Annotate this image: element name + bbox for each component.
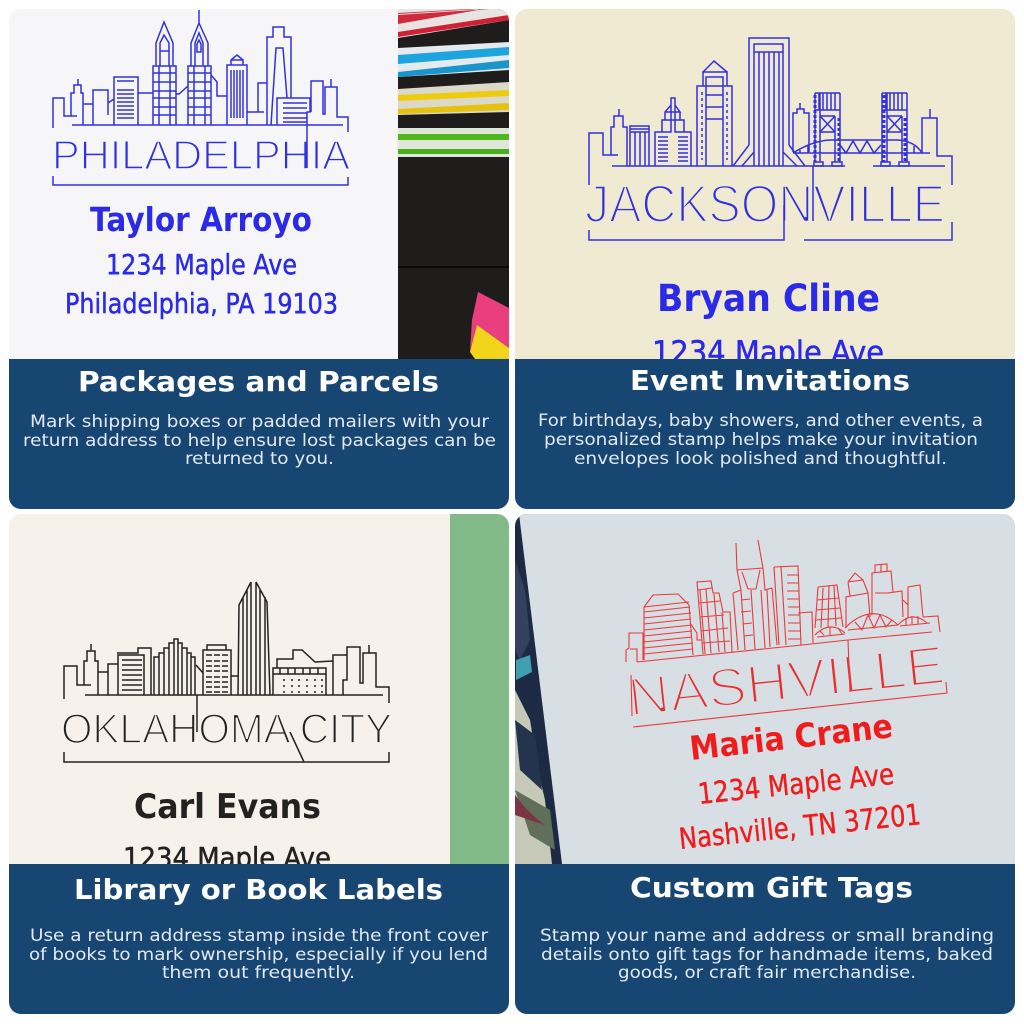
description: Mark shipping boxes or padded mailers with your — [30, 412, 489, 431]
description: personalized stamp helps make your invitation — [544, 430, 978, 449]
description: details onto gift tags for handmade items, baked — [541, 945, 993, 964]
panel: event invitations — [515, 9, 1015, 509]
skyline: Philadelphia — [53, 10, 348, 185]
description: Stamp your name and address or small branding — [540, 926, 994, 945]
description: them out frequently. — [162, 963, 355, 982]
description — [29, 926, 488, 982]
city name: JACKSONVILLE: JACKSONVILLE — [585, 175, 945, 234]
caption band — [9, 359, 509, 509]
stamp street: 1234 Maple Ave — [696, 757, 896, 811]
stamp name: Maria Crane — [687, 706, 895, 768]
description — [23, 412, 496, 468]
panel: custom gift tags — [515, 514, 1015, 1014]
heading: Packages and Parcels — [78, 365, 439, 398]
heading: Library or Book Labels — [74, 873, 443, 906]
city name: NASHVILLE: NASHVILLE — [625, 635, 948, 728]
skyline: Nashville — [626, 540, 947, 727]
description: goods, or craft fair merchandise. — [618, 963, 916, 982]
panel: packages and parcels — [9, 9, 509, 509]
description: return address to help ensure lost packages can be — [23, 431, 496, 450]
photo: Jacksonville stamp on cream paper — [515, 9, 1015, 371]
skyline: Oklahoma City — [64, 582, 389, 762]
stamp name: Carl Evans — [134, 787, 321, 827]
stamp city: Philadelphia, PA 19103 — [65, 287, 338, 320]
stamp street (cropped): 1234 Maple Ave — [123, 841, 331, 874]
caption band — [515, 864, 1015, 1014]
heading: Event Invitations — [630, 364, 910, 397]
panel: library or book labels — [9, 514, 509, 1014]
description: envelopes look polished and thoughtful. — [574, 449, 947, 468]
city name: PHILADELPHIA: PHILADELPHIA — [52, 132, 351, 178]
heading: Custom Gift Tags — [630, 871, 913, 904]
description: returned to you. — [185, 449, 334, 468]
photo: Oklahoma City stamp on paper — [9, 514, 509, 874]
caption band — [515, 359, 1015, 509]
stamp street: 1234 Maple Ave — [106, 248, 297, 281]
skyline: Jacksonville — [589, 38, 952, 240]
description: For birthdays, baby showers, and other events, a — [538, 411, 983, 430]
city name: OKLAHOMA CITY: OKLAHOMA CITY — [61, 705, 392, 752]
photo: Nashville stamp on grey card — [515, 514, 1015, 864]
description: Use a return address stamp inside the front cover — [30, 926, 488, 945]
caption band — [9, 864, 509, 1014]
stamp street (cropped): 1234 Maple Ave — [652, 335, 884, 371]
description — [538, 411, 983, 468]
description: of books to mark ownership, especially if you lend — [29, 945, 488, 964]
photo: Philadelphia stamp on white paper — [9, 9, 509, 359]
stamp name: Bryan Cline — [657, 277, 880, 320]
stamp city: Nashville, TN 37201 — [677, 797, 922, 856]
stamp name: Taylor Arroyo — [90, 200, 312, 239]
description — [540, 926, 994, 982]
